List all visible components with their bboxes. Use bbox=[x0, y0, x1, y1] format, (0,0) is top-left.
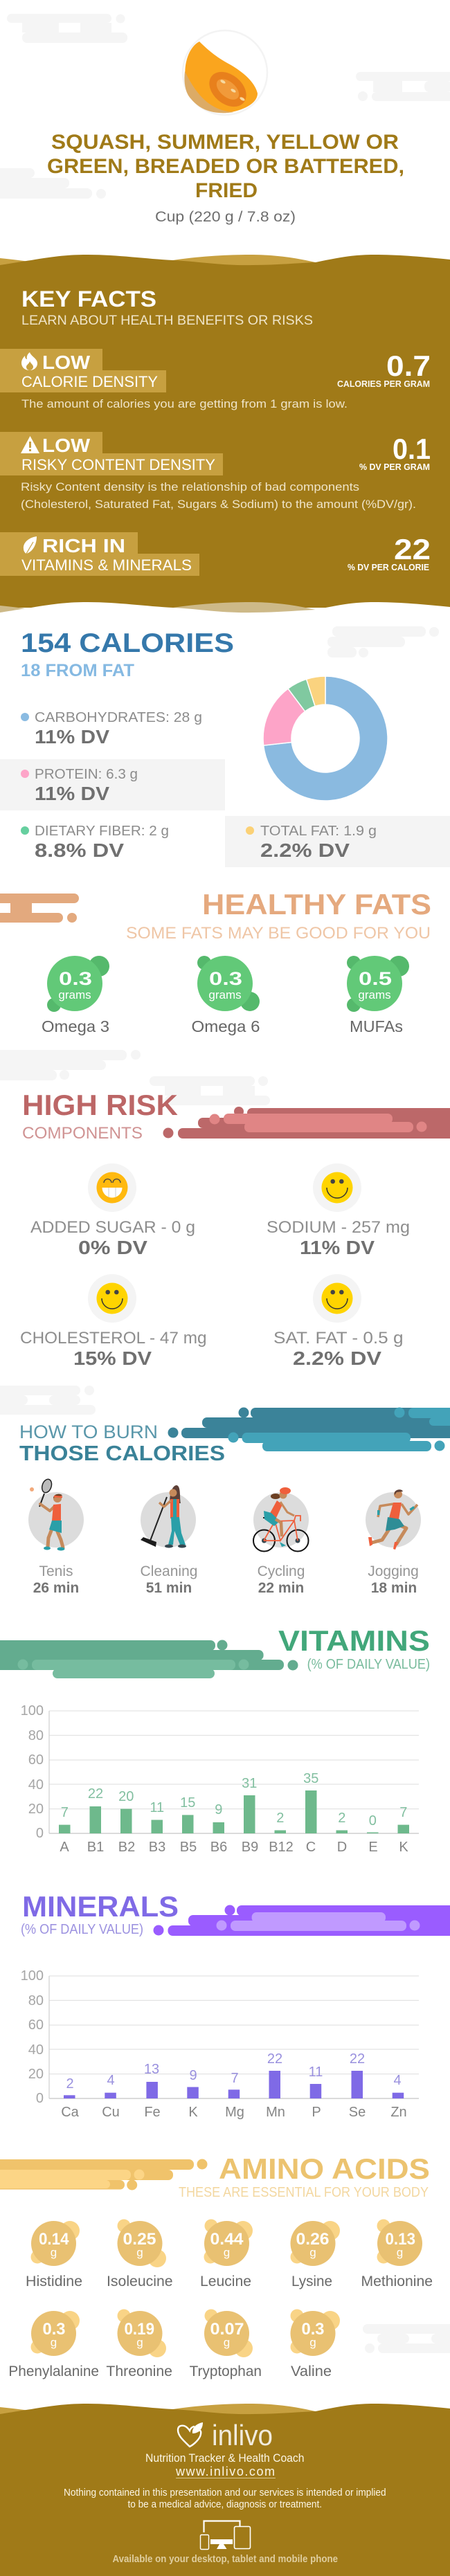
food image: squash wedge bbox=[183, 30, 267, 115]
title: FRIED bbox=[195, 179, 258, 202]
amino: isoleucine bbox=[107, 2219, 173, 2289]
title: SQUASH, SUMMER, YELLOW OR bbox=[51, 131, 399, 154]
fact: rich in vitamins and minerals bbox=[0, 532, 431, 576]
bar chart: minerals: 4 bbox=[393, 2073, 402, 2088]
macro legend bbox=[0, 710, 450, 867]
title: GREEN, BREADED OR BATTERED, bbox=[47, 155, 404, 178]
bar chart: vitamins: 11 bbox=[150, 1800, 164, 1815]
bar chart: minerals: 9 bbox=[189, 2068, 197, 2083]
decorative swoosh: minerals bbox=[154, 1905, 450, 1936]
icon: desktop, tablet and mobile devices bbox=[201, 2521, 251, 2550]
heading: amino acids: AMINO ACIDS bbox=[219, 2152, 430, 2185]
heading: calories: 154 CALORIES bbox=[21, 628, 234, 658]
amino: tryptophan bbox=[190, 2309, 262, 2379]
bar chart: vitamins: B2 bbox=[118, 1840, 135, 1855]
badge: omega 6: grams bbox=[208, 988, 242, 1001]
fact: risky content density: LOW bbox=[42, 435, 91, 456]
amino: phenylalanine: 0.3 bbox=[43, 2320, 65, 2339]
activity: jogging bbox=[366, 1489, 421, 1550]
amino: isoleucine: 0.25 bbox=[123, 2230, 156, 2249]
legend: dietary fiber: DIETARY FIBER: 2 g bbox=[35, 824, 169, 839]
fact: calorie density: 0.7 bbox=[386, 350, 431, 382]
disclaimer bbox=[64, 2487, 386, 2510]
bar chart: vitamins: 60 bbox=[28, 1752, 44, 1768]
fact: rich in vitamins and minerals: VITAMINS & MINERALS bbox=[21, 556, 192, 574]
legend: total fat: TOTAL FAT: 1.9 g bbox=[260, 824, 377, 839]
bar chart: minerals: Se bbox=[349, 2105, 366, 2120]
amino: valine: g bbox=[309, 2336, 316, 2349]
amino: methionine bbox=[361, 2219, 433, 2289]
decorative cloud top left bbox=[7, 14, 127, 43]
disclaimer: to be a medical advice, diagnosis or treatment. bbox=[127, 2499, 322, 2510]
risk item: sodium: SODIUM - 257 mg bbox=[267, 1218, 410, 1237]
bar chart: vitamins: 0 bbox=[36, 1826, 44, 1841]
bar chart: vitamins: B12 bbox=[269, 1840, 294, 1855]
amino: methionine: Methionine bbox=[361, 2274, 433, 2289]
fact: calorie density: LOW bbox=[42, 352, 91, 373]
bar chart: vitamins: 15 bbox=[180, 1795, 195, 1811]
bar chart: vitamins: K bbox=[399, 1840, 408, 1855]
badge: MUFAs bbox=[347, 956, 409, 1035]
legend: dietary fiber bbox=[21, 824, 169, 861]
title bbox=[47, 131, 404, 202]
label: jogging bbox=[368, 1563, 419, 1596]
amino: lysine: 0.26 bbox=[296, 2230, 330, 2249]
risk item: saturated fat: 2.2% DV bbox=[293, 1348, 381, 1369]
legend: total fat bbox=[246, 824, 377, 861]
label: jogging: 18 min bbox=[371, 1580, 417, 1596]
label: cycling: 22 min bbox=[258, 1580, 304, 1596]
subheading: amino acids: THESE ARE ESSENTIAL FOR YOUR BODY bbox=[179, 2185, 429, 2200]
bar chart: vitamins: 2 bbox=[276, 1811, 284, 1826]
fact: risky content density bbox=[0, 432, 431, 511]
subheading: minerals: (% OF DAILY VALUE) bbox=[21, 1922, 143, 1937]
heading: high risk: HIGH RISK bbox=[22, 1089, 178, 1121]
risk item: sodium: 11% DV bbox=[300, 1237, 375, 1258]
legend: carbohydrates: CARBOHYDRATES: 28 g bbox=[35, 710, 202, 725]
subheading: components: COMPONENTS bbox=[22, 1124, 143, 1143]
amino: valine: Valine bbox=[291, 2364, 332, 2379]
decorative cloud top right bbox=[356, 72, 450, 101]
fact: rich in vitamins and minerals: % DV PER CALORIE bbox=[348, 562, 429, 572]
amino: leucine bbox=[200, 2219, 253, 2289]
website link: www.inlivo.com bbox=[175, 2465, 275, 2478]
fact: calorie density: CALORIE DENSITY bbox=[21, 373, 158, 390]
activity: cycling bbox=[253, 1487, 309, 1552]
amino: lysine: g bbox=[309, 2246, 316, 2259]
bar chart: vitamins bbox=[21, 1703, 419, 1855]
availability note: Available on your desktop, tablet and mobile phone bbox=[112, 2554, 338, 2565]
label: cleaning: Cleaning bbox=[141, 1563, 197, 1579]
bar chart: minerals: 60 bbox=[28, 2017, 44, 2033]
icon: grinning face bbox=[88, 1163, 136, 1212]
label: cleaning: 51 min bbox=[146, 1580, 192, 1596]
fact: risky content density: % DV PER GRAM bbox=[359, 462, 430, 472]
decorative cloud lower right bbox=[363, 2324, 450, 2353]
label: cleaning bbox=[141, 1563, 197, 1596]
badge: omega 6 bbox=[191, 956, 260, 1035]
risk item: added sugar: 0% DV bbox=[78, 1237, 147, 1258]
bar chart: vitamins: B9 bbox=[242, 1840, 258, 1855]
bar chart: vitamins: 9 bbox=[215, 1802, 222, 1817]
amino: valine bbox=[291, 2309, 340, 2379]
disclaimer: Nothing contained in this presentation and our services is intended or implied bbox=[64, 2487, 386, 2498]
risk item: added sugar bbox=[30, 1163, 195, 1258]
badge: omega 6: Omega 6 bbox=[191, 1017, 260, 1035]
bar chart: minerals: Ca bbox=[61, 2105, 80, 2120]
heading: healthy fats: HEALTHY FATS bbox=[202, 888, 431, 920]
label: tennis: Tenis bbox=[39, 1563, 73, 1579]
bar chart: minerals: P bbox=[312, 2105, 321, 2120]
tagline: Nutrition Tracker & Health Coach bbox=[145, 2451, 305, 2465]
amino: tryptophan: 0.07 bbox=[210, 2320, 244, 2339]
amino: phenylalanine bbox=[8, 2311, 99, 2379]
bar chart: vitamins: 0 bbox=[369, 1813, 377, 1829]
badge: omega 3 bbox=[42, 956, 109, 1035]
activity: tennis bbox=[28, 1478, 84, 1550]
legend: carbohydrates: 11% DV bbox=[35, 726, 109, 747]
amino: lysine bbox=[291, 2221, 340, 2289]
risk item: added sugar: ADDED SUGAR - 0 g bbox=[30, 1218, 195, 1237]
serving size: Cup (220 g / 7.8 oz) bbox=[155, 209, 296, 225]
bar chart: minerals: Zn bbox=[390, 2105, 407, 2120]
heading: key facts: KEY FACTS bbox=[21, 287, 156, 311]
decorative swoosh: amino acids bbox=[0, 2159, 208, 2190]
label: tennis: 26 min bbox=[33, 1580, 79, 1596]
bar chart: vitamins: 7 bbox=[61, 1805, 69, 1820]
bar chart: minerals: 13 bbox=[144, 2062, 159, 2077]
heading: those calories: THOSE CALORIES bbox=[19, 1441, 225, 1465]
amino: histidine: 0.14 bbox=[39, 2230, 69, 2249]
legend: carbohydrates bbox=[21, 710, 202, 747]
amino: phenylalanine: g bbox=[51, 2336, 57, 2349]
bar chart: minerals: K bbox=[188, 2105, 198, 2120]
amino: histidine: Histidine bbox=[26, 2274, 82, 2289]
badge: omega 6: 0.3 bbox=[209, 968, 242, 989]
fact: risky content density: (Cholesterol, Saturated Fat, Sugars & Sodium) to the amount (%DV/gr). bbox=[21, 498, 416, 511]
bar chart: minerals: Fe bbox=[144, 2105, 161, 2120]
bar chart: vitamins: 40 bbox=[28, 1777, 44, 1793]
badge: MUFAs: grams bbox=[358, 988, 391, 1001]
donut chart: calories by macronutrient bbox=[263, 676, 388, 801]
amino: valine: 0.3 bbox=[302, 2320, 324, 2339]
amino: threonine: Threonine bbox=[106, 2364, 172, 2379]
decorative swoosh: vitamins bbox=[0, 1640, 298, 1678]
legend: dietary fiber: 8.8% DV bbox=[35, 840, 124, 861]
bar chart: minerals: 11 bbox=[309, 2065, 323, 2080]
legend: protein: 11% DV bbox=[35, 783, 109, 804]
amino: tryptophan: Tryptophan bbox=[190, 2364, 262, 2379]
bar chart: vitamins: E bbox=[368, 1840, 378, 1855]
risk item: sodium bbox=[267, 1163, 410, 1258]
decorative cloud middle left bbox=[0, 168, 106, 199]
label: tennis bbox=[33, 1563, 79, 1596]
label: cycling bbox=[258, 1563, 305, 1596]
amino: lysine: Lysine bbox=[291, 2274, 332, 2289]
bar chart: vitamins: 20 bbox=[118, 1789, 134, 1804]
bar chart: vitamins: 7 bbox=[399, 1805, 407, 1820]
label: cycling: Cycling bbox=[258, 1563, 305, 1579]
bar chart: vitamins: 20 bbox=[28, 1802, 44, 1817]
bar chart: minerals: Cu bbox=[102, 2105, 120, 2120]
badge: omega 3: 0.3 bbox=[59, 968, 92, 989]
bar chart: minerals: 80 bbox=[28, 1993, 44, 2008]
badge: omega 3: grams bbox=[58, 988, 91, 1001]
bar chart: minerals: 7 bbox=[231, 2071, 239, 2086]
bar chart: vitamins: 35 bbox=[303, 1771, 318, 1786]
subheading: vitamins: (% OF DAILY VALUE) bbox=[307, 1657, 430, 1672]
bar chart: vitamins: 2 bbox=[338, 1811, 345, 1826]
risk item: saturated fat: SAT. FAT - 0.5 g bbox=[273, 1329, 403, 1348]
fact: calorie density: CALORIES PER GRAM bbox=[337, 379, 430, 389]
amino: isoleucine: g bbox=[136, 2246, 143, 2259]
bar chart: vitamins: 80 bbox=[28, 1728, 44, 1743]
badge: omega 3: Omega 3 bbox=[42, 1017, 109, 1035]
bar chart: minerals: 2 bbox=[66, 2076, 74, 2092]
decorative cloud below fats left bbox=[0, 1050, 141, 1080]
decorative swoosh: high risk bbox=[163, 1107, 450, 1139]
bar chart: minerals: 22 bbox=[350, 2051, 365, 2067]
icon: smiling face bbox=[88, 1274, 136, 1323]
activity: cleaning bbox=[141, 1485, 196, 1548]
risk item: cholesterol: CHOLESTEROL - 47 mg bbox=[20, 1329, 206, 1348]
fact: rich in vitamins and minerals: RICH IN bbox=[42, 535, 125, 556]
bar chart: vitamins: 100 bbox=[21, 1703, 44, 1718]
fact: rich in vitamins and minerals: 22 bbox=[394, 533, 431, 565]
bar chart: vitamins: B1 bbox=[87, 1840, 104, 1855]
bar chart: vitamins: 31 bbox=[242, 1776, 257, 1791]
amino: threonine bbox=[106, 2309, 172, 2379]
bar chart: vitamins: B6 bbox=[210, 1840, 227, 1855]
amino: threonine: g bbox=[136, 2336, 143, 2349]
bar chart: vitamins: 22 bbox=[88, 1786, 103, 1802]
legend: protein: PROTEIN: 6.3 g bbox=[35, 767, 138, 782]
badge: MUFAs: 0.5 bbox=[359, 968, 392, 989]
heading: minerals: MINERALS bbox=[22, 1890, 179, 1923]
logo: inlivo heart and leaf bbox=[178, 2422, 203, 2447]
icon: smiling face bbox=[313, 1163, 361, 1212]
bar chart: vitamins: C bbox=[306, 1840, 316, 1855]
amino: threonine: 0.19 bbox=[125, 2320, 154, 2339]
fact: calorie density: The amount of calories you are getting from 1 gram is low. bbox=[21, 397, 348, 410]
subheading: LEARN ABOUT HEALTH BENEFITS OR RISKS bbox=[21, 314, 313, 328]
decorative swoosh: burn calories bbox=[168, 1408, 450, 1451]
fact: calorie density bbox=[0, 349, 431, 410]
amino: isoleucine: Isoleucine bbox=[107, 2274, 173, 2289]
fact: risky content density: RISKY CONTENT DENSITY bbox=[21, 456, 215, 473]
fact: risky content density: 0.1 bbox=[393, 433, 431, 465]
icon: smiling face bbox=[313, 1274, 361, 1323]
bar chart: minerals: 4 bbox=[107, 2073, 115, 2088]
heading: how to burn: HOW TO BURN bbox=[19, 1422, 158, 1442]
decorative cloud above burn section bbox=[0, 1386, 96, 1415]
icon: leaf bbox=[24, 536, 37, 554]
bar chart: minerals: 0 bbox=[36, 2091, 44, 2106]
bar chart: minerals: Mg bbox=[225, 2105, 244, 2120]
bar chart: vitamins: A bbox=[60, 1840, 69, 1855]
decorative cloud below fats centre bbox=[150, 1076, 270, 1105]
heading: vitamins: VITAMINS bbox=[278, 1624, 430, 1657]
logo wordmark: inlivo bbox=[212, 2419, 273, 2451]
bar chart: minerals: Mn bbox=[266, 2105, 285, 2120]
bar chart: minerals: 20 bbox=[28, 2067, 44, 2082]
bar chart: minerals: 22 bbox=[267, 2051, 282, 2067]
risk item: cholesterol bbox=[20, 1274, 206, 1369]
icon: warning triangle bbox=[21, 436, 39, 453]
fact: risky content density: Risky Content density is the relationship of bad components bbox=[21, 480, 359, 493]
badge: MUFAs: MUFAs bbox=[350, 1017, 403, 1035]
amino: histidine: g bbox=[51, 2246, 57, 2259]
amino: tryptophan: g bbox=[224, 2336, 230, 2349]
legend: protein bbox=[21, 767, 138, 804]
amino: leucine: Leucine bbox=[200, 2274, 251, 2289]
panel: key facts bbox=[0, 255, 450, 608]
wave divider below key facts bbox=[0, 602, 450, 624]
label: jogging: Jogging bbox=[368, 1563, 419, 1579]
amino: methionine: 0.13 bbox=[385, 2230, 415, 2249]
icon: flame bbox=[21, 352, 37, 370]
amino: leucine: 0.44 bbox=[210, 2230, 244, 2249]
legend: total fat: 2.2% DV bbox=[260, 840, 350, 861]
bar chart: minerals: 40 bbox=[28, 2042, 44, 2058]
bar chart: vitamins: D bbox=[337, 1840, 347, 1855]
subheading: calories from fat: 18 FROM FAT bbox=[21, 661, 134, 680]
amino: methionine: g bbox=[397, 2246, 403, 2259]
bar chart: vitamins: B5 bbox=[180, 1840, 197, 1855]
amino: phenylalanine: Phenylalanine bbox=[8, 2364, 99, 2379]
amino: leucine: g bbox=[224, 2246, 230, 2259]
panel: footer bbox=[0, 2404, 450, 2576]
risk item: cholesterol: 15% DV bbox=[73, 1348, 152, 1369]
bar chart: minerals: 100 bbox=[21, 1968, 44, 1984]
subheading: healthy fats: SOME FATS MAY BE GOOD FOR YOU bbox=[126, 924, 431, 943]
risk item: saturated fat bbox=[273, 1274, 403, 1369]
amino: histidine bbox=[26, 2221, 82, 2289]
bar chart: vitamins: B3 bbox=[149, 1840, 165, 1855]
decorative swoosh: healthy fats bbox=[0, 894, 79, 923]
bar chart: minerals bbox=[21, 1968, 419, 2120]
decorative cloud near calories bbox=[327, 626, 439, 657]
